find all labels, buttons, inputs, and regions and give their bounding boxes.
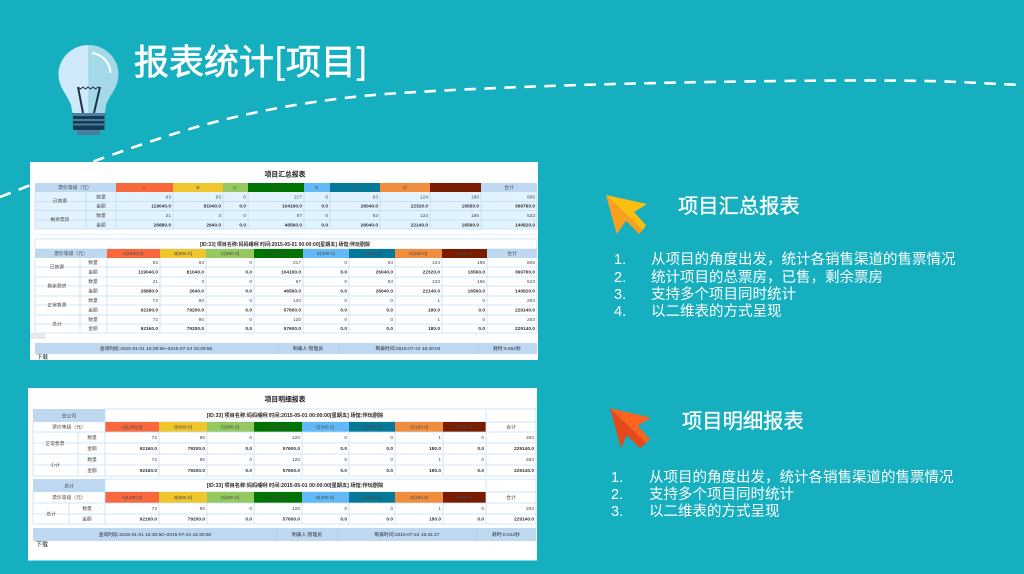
table: project detail by channel: 0 bbox=[249, 298, 252, 304]
table: summary: 93 bbox=[216, 194, 221, 200]
list: summary report features: 2. bbox=[614, 270, 626, 286]
report footer bar: 耗时:0.652秒 bbox=[493, 345, 521, 352]
table: summary: 0.0 bbox=[239, 222, 246, 228]
table: detail for general company: 229140.0 bbox=[514, 446, 534, 452]
table: detail for general company: 0 bbox=[390, 435, 393, 441]
table: detail total: 120 bbox=[292, 506, 300, 512]
table: project detail by channel: 0.0 bbox=[245, 270, 252, 276]
table: detail for general company: 0 bbox=[481, 457, 484, 463]
table: summary: G bbox=[403, 185, 407, 191]
table: detail total: A[1280.0] bbox=[122, 495, 142, 501]
list: summary report features: 3. bbox=[614, 287, 626, 303]
list: summary report features: 从项目的角度出发，统计各销售渠道的售票情况 bbox=[651, 251, 956, 268]
table: summary: 金额 bbox=[96, 202, 106, 210]
table: detail for general company: 72 bbox=[152, 457, 157, 463]
table: project detail by channel: 数量 bbox=[88, 278, 98, 285]
table: project detail by channel: 92160.0 bbox=[141, 308, 158, 314]
table: detail for general company: 正常售票 bbox=[45, 440, 65, 447]
table: project detail by channel: 1 bbox=[437, 298, 440, 304]
report title: 项目明细报表 bbox=[265, 394, 306, 404]
table: detail for general company: 1 bbox=[438, 457, 441, 463]
table: project detail by channel: D[480.0] bbox=[269, 251, 287, 257]
table: project detail by channel: [ID:33] 项目名称:妈妈睡咧 时间:2015-05-01 00:00:00[星期五] 场馆:伴玩剧院 bbox=[200, 241, 370, 248]
list: detail report features: 1. bbox=[611, 470, 623, 486]
table: detail for general company: 90 bbox=[200, 435, 205, 441]
table: detail for general company: 92160.0 bbox=[140, 446, 157, 452]
table: project detail by channel: 104160.0 bbox=[281, 270, 301, 276]
table: detail total bbox=[33, 479, 536, 524]
table: project detail by channel: C[680.0] bbox=[221, 251, 239, 257]
icon: orange arrow bbox=[610, 408, 651, 448]
table: detail total: 0.0 bbox=[386, 517, 393, 523]
table: project detail by channel: 0 bbox=[482, 298, 485, 304]
table: detail for general company: B[880.0] bbox=[174, 425, 192, 431]
download link: 下载 bbox=[36, 540, 48, 548]
table: detail for general company: 0.0 bbox=[245, 446, 252, 452]
table: summary: 合计 bbox=[504, 184, 514, 191]
table: project detail by channel: 120 bbox=[293, 317, 301, 323]
table: project detail by channel: 0.0 bbox=[245, 326, 252, 332]
table: summary: 46560.0 bbox=[285, 222, 302, 228]
table: detail for general company: G[180.0] bbox=[410, 425, 428, 431]
table: project detail by channel: 合计 bbox=[507, 250, 517, 257]
table: detail total: G[180.0] bbox=[410, 495, 428, 501]
table: detail total: 180.0 bbox=[429, 517, 441, 523]
table: detail total: 数量 bbox=[82, 505, 92, 512]
table: detail total: D[480.0] bbox=[269, 495, 287, 501]
table: project detail by channel: 剩余票房 bbox=[47, 282, 67, 290]
table: summary: 0.0 bbox=[239, 204, 246, 210]
table: detail for general company: F[280.0] bbox=[363, 425, 381, 431]
list: summary report features bbox=[614, 251, 956, 320]
table: project detail by channel: 217 bbox=[293, 260, 301, 266]
table: detail total: 0 bbox=[481, 506, 484, 512]
table: detail for general company: 金额 bbox=[87, 467, 97, 474]
table: project detail by channel: 22320.0 bbox=[423, 270, 440, 276]
table: project detail by channel: 523 bbox=[527, 279, 535, 285]
table: detail total: [ID:33] 项目名称:妈妈睡咧 时间:2015-05-01 00:00:00[星期五] 场馆:伴玩剧院 bbox=[207, 481, 384, 489]
table: project detail by channel bbox=[30, 234, 537, 339]
table: detail total: 57600.0 bbox=[283, 517, 300, 523]
table: project detail by channel: 140820.0 bbox=[515, 289, 535, 295]
table: summary: 票价等级（元） bbox=[58, 184, 92, 191]
report footer bar: 制表时间:2015-07-24 16:31:27 bbox=[374, 531, 440, 538]
icon: light bulb bbox=[58, 45, 118, 135]
list: summary report features: 统计项目的总票房，已售，剩余票房 bbox=[651, 268, 883, 286]
icon: yellow arrow bbox=[606, 195, 647, 234]
table: summary: 0 bbox=[243, 213, 246, 219]
table: project detail by channel: 0.0 bbox=[478, 326, 485, 332]
table: project detail by channel: 金额 bbox=[88, 325, 98, 332]
table: summary: 217 bbox=[294, 194, 302, 200]
table: project detail by channel: H[80.0] bbox=[456, 251, 472, 257]
table: summary: 93 bbox=[373, 213, 378, 219]
table: project detail by channel: 0 bbox=[344, 260, 347, 266]
table: summary: 0 bbox=[243, 194, 246, 200]
table: project detail by channel: 93 bbox=[199, 260, 204, 266]
table: summary: 已售票 bbox=[53, 198, 67, 204]
table: project detail by channel: 3 bbox=[201, 279, 204, 285]
table: summary: A bbox=[142, 185, 146, 191]
table: project detail by channel: 0 bbox=[249, 279, 252, 285]
table: detail for general company: 0.0 bbox=[477, 446, 484, 452]
table: project detail by channel: 93 bbox=[388, 279, 393, 285]
table: detail total: 92160.0 bbox=[140, 517, 157, 523]
heading: project summary report: 项目汇总报表 bbox=[678, 189, 800, 219]
table: project detail by channel: 81040.0 bbox=[187, 270, 204, 276]
table: detail for general company: 0 bbox=[481, 435, 484, 441]
table: project detail by channel: A[1280.0] bbox=[123, 251, 143, 257]
table: project detail by channel: 总计 bbox=[52, 320, 62, 328]
table: detail for general company: 283 bbox=[526, 435, 534, 441]
table: project detail by channel: 0 bbox=[344, 317, 347, 323]
table: detail for general company: 57600.0 bbox=[283, 446, 300, 452]
table: project detail by channel: 票价等级（元） bbox=[54, 250, 88, 257]
table: project detail by channel: 229140.0 bbox=[515, 326, 535, 332]
table: project detail by channel: 119040.0 bbox=[138, 270, 158, 276]
table: detail total: 0.0 bbox=[477, 517, 484, 523]
table: detail for general company: 72 bbox=[152, 435, 157, 441]
list: detail report features bbox=[611, 469, 954, 520]
table: summary: 186 bbox=[471, 213, 479, 219]
table: detail for general company: 0.0 bbox=[340, 446, 347, 452]
table: project detail by channel: 180.0 bbox=[428, 326, 440, 332]
table: summary: 26040.0 bbox=[361, 222, 378, 228]
table: project detail by channel: 16560.0 bbox=[468, 289, 485, 295]
table: summary: 22320.0 bbox=[411, 204, 428, 210]
table: summary: 剩余票房 bbox=[50, 216, 70, 223]
table: detail for general company: 数量 bbox=[87, 456, 97, 463]
table: project detail by channel: 数量 bbox=[88, 297, 98, 304]
table: detail for general company: 0.0 bbox=[386, 468, 393, 474]
table: detail for general company: 总公司 bbox=[62, 412, 76, 420]
table: project detail by channel: 26040.0 bbox=[376, 289, 393, 295]
table: detail total: F[280.0] bbox=[363, 495, 381, 501]
table: detail total: 总计 bbox=[64, 482, 74, 490]
report footer bar: 制表人:管理员 bbox=[292, 531, 322, 538]
table: project detail by channel: 283 bbox=[527, 298, 535, 304]
table: detail for general company: 0.0 bbox=[245, 468, 252, 474]
table: detail total: 79200.0 bbox=[188, 517, 205, 523]
table: detail for general company: 0.0 bbox=[386, 446, 393, 452]
table: project detail by channel: 229140.0 bbox=[515, 308, 535, 314]
table: detail for general company: E[380.0] bbox=[316, 425, 334, 431]
list: detail report features: 以二维表的方式呈现 bbox=[649, 503, 780, 520]
heading: project detail report: 项目明细报表 bbox=[682, 404, 804, 434]
table: project detail by channel: 79200.0 bbox=[187, 308, 204, 314]
table: project detail by channel: 数量 bbox=[88, 259, 98, 266]
table: summary: 2640.0 bbox=[206, 222, 221, 228]
table: project detail by channel: 0.0 bbox=[340, 289, 347, 295]
table: summary: 数量 bbox=[96, 193, 106, 200]
table: project detail by channel: 0 bbox=[249, 260, 252, 266]
table: project detail by channel: 124 bbox=[432, 260, 440, 266]
table: project detail by channel: G[180.0] bbox=[409, 251, 427, 257]
table: project detail by channel: 369760.0 bbox=[515, 270, 535, 276]
table: summary: 金额 bbox=[96, 221, 106, 228]
table: summary: 369760.0 bbox=[515, 204, 535, 210]
table: project detail by channel: 金额 bbox=[88, 288, 98, 295]
table: project detail by channel: F[280.0] bbox=[363, 251, 381, 257]
table: detail total: 0.0 bbox=[340, 517, 347, 523]
table: detail total: E[380.0] bbox=[316, 495, 334, 501]
table: project detail by channel: 0.0 bbox=[386, 308, 393, 314]
table: summary: 140820.0 bbox=[515, 222, 535, 228]
table: detail total: 总计 bbox=[46, 510, 56, 518]
table: summary: 0 bbox=[325, 194, 328, 200]
table: summary bbox=[35, 183, 537, 229]
report footer bar bbox=[35, 343, 537, 354]
table: summary: 26880.0 bbox=[154, 222, 171, 228]
table: detail for general company: 合计 bbox=[506, 424, 516, 431]
table: summary: 0 bbox=[325, 213, 328, 219]
table: summary: 0.0 bbox=[321, 204, 328, 210]
table: project detail by channel: 0 bbox=[249, 317, 252, 323]
table: summary: 186 bbox=[471, 194, 479, 200]
table: detail for general company: 120 bbox=[292, 435, 300, 441]
table: detail for general company: 79200.0 bbox=[188, 468, 205, 474]
table: summary: 3 bbox=[218, 213, 221, 219]
table: summary: 93 bbox=[166, 194, 171, 200]
list: detail report features: 2. bbox=[611, 487, 623, 503]
table: project detail by channel: 0.0 bbox=[478, 308, 485, 314]
table: summary: 16560.0 bbox=[462, 222, 479, 228]
table: detail total: 0 bbox=[344, 506, 347, 512]
table: detail for general company: A[1280.0] bbox=[122, 425, 142, 431]
table: summary: 93 bbox=[373, 194, 378, 200]
table: detail for general company: 0 bbox=[249, 457, 252, 463]
table: detail total: 283 bbox=[526, 506, 534, 512]
table: summary: 0.0 bbox=[321, 222, 328, 228]
table: project detail by channel: 数量 bbox=[88, 316, 98, 323]
table: detail total: 0.0 bbox=[245, 517, 252, 523]
table: project detail by channel: 金额 bbox=[88, 307, 98, 314]
table: detail for general company: 57600.0 bbox=[283, 468, 300, 474]
table: project detail by channel: 72 bbox=[153, 317, 158, 323]
report footer bar: 查询时段:2015-01-01 16:30:50~2015-07-24 16:30:50 bbox=[99, 531, 212, 538]
table: detail total: 金额 bbox=[82, 516, 92, 523]
table: project detail by channel: 186 bbox=[477, 279, 485, 285]
table: project detail by channel: 26040.0 bbox=[376, 270, 393, 276]
table: project detail by channel: 16560.0 bbox=[468, 270, 485, 276]
table: detail total: B[880.0] bbox=[174, 495, 192, 501]
table: summary: 124 bbox=[420, 194, 428, 200]
table: project detail by channel: 0.0 bbox=[386, 326, 393, 332]
table: detail for general company: 90 bbox=[200, 457, 205, 463]
list: summary report features: 4. bbox=[614, 304, 626, 320]
table: detail for general company: 小计 bbox=[50, 462, 60, 468]
table: detail for general company: D[480.0] bbox=[269, 425, 287, 431]
report footer bar: 查询时段:2015-01-01 16:29:56~2015-07-24 16:29:56 bbox=[100, 345, 213, 352]
table: detail total: 0 bbox=[249, 506, 252, 512]
table: detail for general company: 0.0 bbox=[477, 468, 484, 474]
table: detail for general company bbox=[33, 409, 536, 476]
table: summary: C bbox=[233, 185, 237, 191]
table: detail total: 1 bbox=[438, 506, 441, 512]
table: project detail by channel: 0 bbox=[482, 317, 485, 323]
table: detail total: 0 bbox=[390, 506, 393, 512]
table: project detail by channel: 0 bbox=[390, 317, 393, 323]
table: detail for general company: C[680.0] bbox=[221, 425, 239, 431]
table: project detail by channel: 0.0 bbox=[245, 289, 252, 295]
table: project detail by channel: 0 bbox=[344, 298, 347, 304]
table: project detail by channel: 72 bbox=[153, 298, 158, 304]
table: summary: D bbox=[274, 185, 278, 191]
table: project detail by channel: 0.0 bbox=[245, 308, 252, 314]
table: project detail by channel: 90 bbox=[199, 317, 204, 323]
table: detail total: 90 bbox=[200, 506, 205, 512]
table: detail for general company: 180.0 bbox=[429, 468, 441, 474]
list: detail report features: 支持多个项目同时统计 bbox=[649, 486, 794, 503]
list: summary report features: 1. bbox=[614, 252, 626, 268]
table: summary: 81040.0 bbox=[204, 204, 221, 210]
table: summary: B bbox=[196, 185, 200, 191]
table: project detail by channel: 93 bbox=[388, 260, 393, 266]
table: project detail by channel: 金额 bbox=[88, 269, 98, 276]
table: detail for general company: 0 bbox=[344, 457, 347, 463]
table: summary: E bbox=[315, 185, 319, 191]
title: 报表统计[项目] bbox=[134, 34, 368, 86]
list: detail report features: 从项目的角度出发，统计各销售渠道的售票情况 bbox=[649, 469, 954, 486]
table: detail for general company: 票价等级（元） bbox=[52, 424, 86, 431]
table: detail total: 229140.0 bbox=[514, 517, 534, 523]
table: detail for general company: 92160.0 bbox=[140, 468, 157, 474]
table: project detail by channel: 0.0 bbox=[340, 270, 347, 276]
table: detail for general company: 0 bbox=[344, 435, 347, 441]
panel: project detail report screenshot bbox=[28, 388, 537, 560]
list: detail report features: 3. bbox=[611, 504, 623, 520]
list: summary report features: 以二维表的方式呈现 bbox=[651, 303, 782, 320]
table: detail total: H[80.0] bbox=[456, 495, 472, 501]
table: project detail by channel: 0.0 bbox=[340, 308, 347, 314]
table: summary: 123 bbox=[420, 213, 428, 219]
table: project detail by channel: E[380.0] bbox=[317, 251, 335, 257]
table: project detail by channel: 已售票 bbox=[50, 264, 64, 270]
table: project detail by channel: 57600.0 bbox=[284, 326, 301, 332]
table: detail for general company: H[80.0] bbox=[456, 425, 472, 431]
table: summary: 26040.0 bbox=[361, 204, 378, 210]
table: detail for general company: 229140.0 bbox=[514, 468, 534, 474]
report footer bar bbox=[33, 528, 536, 541]
table: project detail by channel: 79200.0 bbox=[187, 326, 204, 332]
table: detail total: C[680.0] bbox=[221, 495, 239, 501]
table: project detail by channel: 57600.0 bbox=[284, 308, 301, 314]
table: project detail by channel: 180.0 bbox=[428, 308, 440, 314]
table: project detail by channel: 0.0 bbox=[340, 326, 347, 332]
report footer bar: 制表时间:2015-07-24 16:30:04 bbox=[375, 345, 441, 352]
report title: 项目汇总报表 bbox=[265, 170, 306, 178]
table: project detail by channel: 26880.0 bbox=[141, 289, 158, 295]
table: detail for general company: 79200.0 bbox=[188, 446, 205, 452]
table: detail for general company: 283 bbox=[526, 457, 534, 463]
table: project detail by channel: 97 bbox=[296, 279, 301, 285]
table: project detail by channel: 22140.0 bbox=[423, 289, 440, 295]
report footer bar: 制表人:管理员 bbox=[293, 345, 323, 352]
table: detail for general company: 数量 bbox=[87, 434, 97, 441]
table: summary: F bbox=[354, 185, 357, 191]
table: project detail by channel: 93 bbox=[153, 260, 158, 266]
table: project detail by channel: 123 bbox=[432, 279, 440, 285]
table: summary: 806 bbox=[527, 194, 535, 200]
report footer bar: 耗时:0.012秒 bbox=[492, 531, 520, 538]
table: project detail by channel: 806 bbox=[527, 260, 535, 266]
download link: 下载 bbox=[37, 353, 49, 361]
panel: project summary report screenshot bbox=[30, 162, 538, 361]
table: project detail by channel: 120 bbox=[293, 298, 301, 304]
table: summary: 21 bbox=[166, 213, 171, 219]
table: project detail by channel: B[880.0] bbox=[174, 251, 192, 257]
table: project detail by channel: 1 bbox=[437, 317, 440, 323]
table: project detail by channel: 46560.0 bbox=[284, 289, 301, 295]
table: summary: 97 bbox=[297, 213, 302, 219]
table: project detail by channel: 92160.0 bbox=[141, 326, 158, 332]
table: summary: 16560.0 bbox=[462, 204, 479, 210]
table: project detail by channel: 2640.0 bbox=[189, 289, 204, 295]
list: summary report features: 支持多个项目同时统计 bbox=[651, 286, 796, 303]
table: summary: 数量 bbox=[96, 212, 106, 219]
table: project detail by channel: 21 bbox=[153, 279, 158, 285]
table: detail for general company: 0 bbox=[249, 435, 252, 441]
table: project detail by channel: 0 bbox=[344, 279, 347, 285]
table: detail for general company: 120 bbox=[292, 457, 300, 463]
table: summary: 22140.0 bbox=[411, 222, 428, 228]
table: detail total: 合计 bbox=[506, 494, 516, 501]
table: project detail by channel: 186 bbox=[477, 260, 485, 266]
table: project detail by channel: 283 bbox=[527, 317, 535, 323]
table: detail for general company: [ID:33] 项目名称:妈妈睡咧 时间:2015-05-01 00:00:00[星期五] 场馆:伴玩剧院 bbox=[207, 411, 384, 419]
table: summary: 523 bbox=[527, 213, 535, 219]
table: project detail by channel: 正常售票 bbox=[47, 302, 67, 308]
table: detail total: 票价等级（元） bbox=[52, 494, 86, 501]
table: detail for general company: 1 bbox=[438, 435, 441, 441]
table: detail total: 72 bbox=[152, 506, 157, 512]
table: detail for general company: 0 bbox=[390, 457, 393, 463]
table: detail for general company: 金额 bbox=[87, 445, 97, 452]
table: summary: H bbox=[453, 185, 457, 191]
table: summary: 104160.0 bbox=[282, 204, 302, 210]
table: detail for general company: 0.0 bbox=[340, 468, 347, 474]
table: project detail by channel: 90 bbox=[199, 298, 204, 304]
table: project detail by channel: 0 bbox=[390, 298, 393, 304]
table: summary: 119040.0 bbox=[151, 204, 171, 210]
table: detail for general company: 180.0 bbox=[429, 446, 441, 452]
